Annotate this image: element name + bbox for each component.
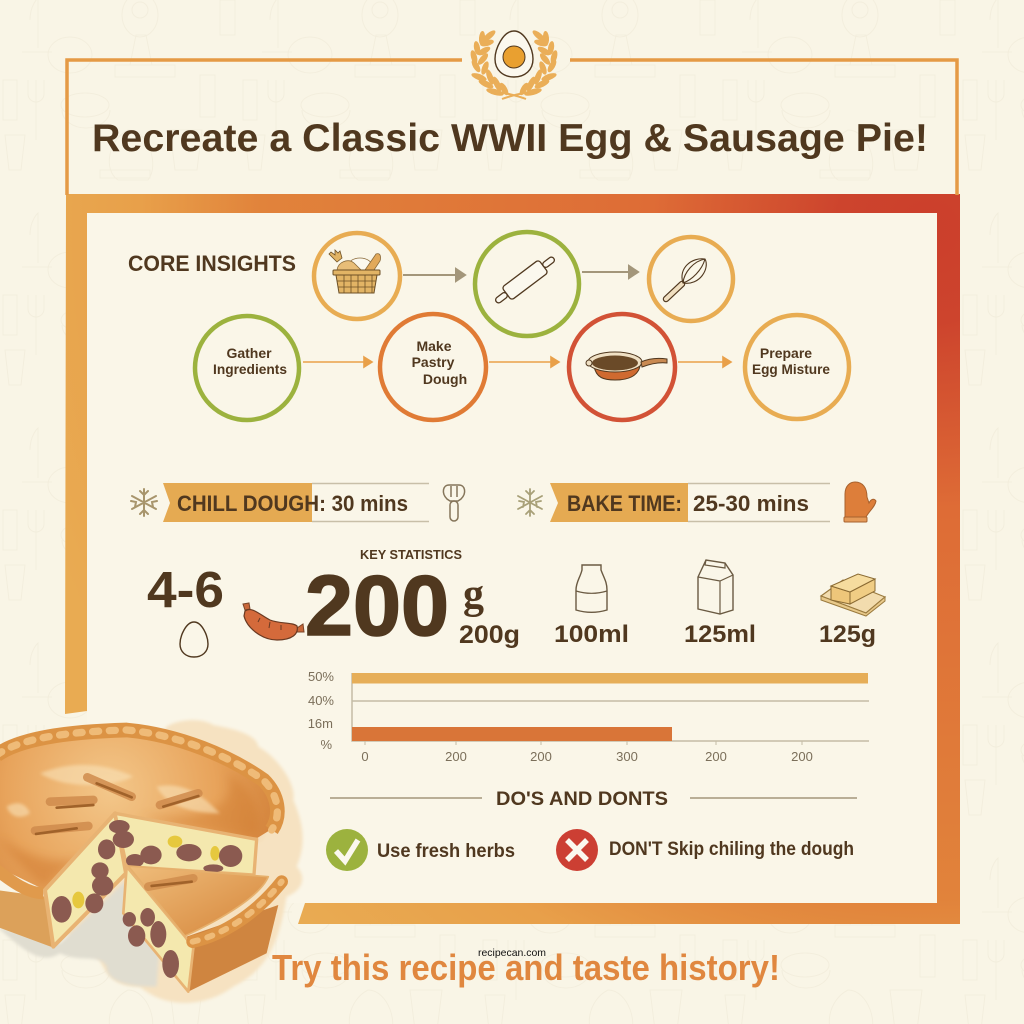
- step circle: frying pan icon: [569, 314, 675, 420]
- bar chart: [308, 669, 869, 764]
- arrow: pastry to pan: [489, 357, 559, 367]
- bar chart: 300: [616, 749, 638, 764]
- bar chart: 200: [530, 749, 552, 764]
- step circle: gather ingredients: Ingredients: [213, 361, 287, 377]
- footer: source: recipecan.com: [478, 947, 546, 959]
- step circle: gather ingredients: Gather: [226, 345, 272, 361]
- step circle: prepare egg mixture: [745, 315, 849, 419]
- stat: sausage: g: [463, 572, 484, 618]
- banner: bake time: BAKE TIME:: [567, 491, 682, 516]
- icon: pastry tool: [443, 485, 465, 521]
- arrow: pan to egg mixture: [678, 357, 731, 367]
- stat: milk bottle: [554, 565, 629, 648]
- icon: oven mitt: [844, 482, 876, 522]
- footer: call to action: Try this recipe and taste history!: [272, 947, 780, 988]
- stat: eggs: [147, 561, 224, 657]
- step circle: prepare egg mixture: Egg Misture: [752, 361, 830, 377]
- stat: milk carton: 125ml: [684, 621, 756, 648]
- banner: chill dough: CHILL DOUGH: 30 mins: [177, 491, 408, 516]
- stat: sausage: [243, 559, 520, 654]
- step circle: whisk icon: [649, 237, 733, 321]
- arrow: gather to pastry: [303, 357, 372, 367]
- arrow: rolling pin to whisk: [582, 266, 638, 278]
- dont item: [556, 829, 854, 871]
- bar chart: 200: [445, 749, 467, 764]
- bar chart: 200: [791, 749, 813, 764]
- step circle: gather ingredients: [195, 316, 299, 420]
- banner: bake time: [550, 483, 830, 522]
- do item: [326, 829, 515, 871]
- dont item: DON'T Skip chiling the dough: [609, 839, 854, 860]
- content panel: [87, 213, 937, 903]
- heading: dos and donts: DO'S AND DONTS: [496, 789, 668, 810]
- step circle: make pastry dough: Dough: [423, 371, 467, 387]
- bar chart: 200: [705, 749, 727, 764]
- step circle: basket icon: [314, 233, 400, 319]
- stat: sausage: 200g: [459, 621, 520, 649]
- do item: Use fresh herbs: [377, 841, 515, 862]
- icon: snowflake right: [518, 489, 542, 516]
- step circle: make pastry dough: Pastry: [412, 354, 455, 370]
- stat: milk carton: [684, 560, 756, 648]
- step circle: prepare egg mixture: Prepare: [760, 345, 812, 361]
- title frame: [67, 60, 957, 195]
- step circle: make pastry dough: [380, 314, 486, 420]
- bar chart: 16m: [308, 716, 333, 731]
- stat: milk bottle: 100ml: [554, 621, 629, 648]
- arrow: basket to rolling pin: [403, 269, 465, 281]
- banner: chill dough: [163, 483, 429, 522]
- icon: snowflake left: [131, 489, 157, 516]
- step circle: make pastry dough: Make: [416, 338, 452, 354]
- stat: butter: [819, 574, 885, 648]
- banner: bake time: 25-30 mins: [693, 491, 809, 516]
- bar chart: %: [320, 737, 332, 752]
- stat: eggs: 4-6: [147, 561, 224, 618]
- bar chart: 0: [361, 749, 369, 764]
- title: Recreate a Classic WWII Egg & Sausage Pie!: [92, 117, 928, 160]
- label: key statistics: KEY STATISTICS: [360, 547, 462, 562]
- stat: butter: 125g: [819, 621, 876, 648]
- bar chart: 50%: [308, 669, 334, 684]
- step circle: rolling pin icon: [475, 232, 579, 336]
- bar chart: 40%: [308, 693, 334, 708]
- gradient frame band: [65, 194, 960, 924]
- stat: sausage: 200: [305, 559, 449, 654]
- icon: egg and laurel emblem: [469, 29, 559, 99]
- heading: core insights: CORE INSIGHTS: [128, 251, 296, 276]
- illustration: sausage pie: [0, 720, 303, 1003]
